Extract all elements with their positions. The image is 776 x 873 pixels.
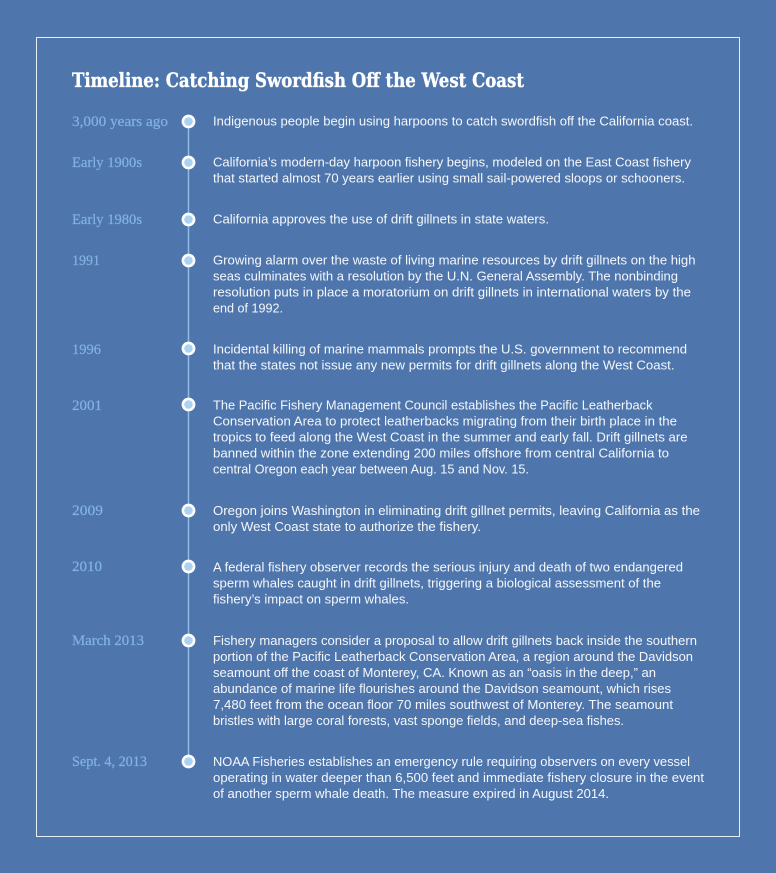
- entry: Early 1980s: [72, 212, 549, 228]
- timeline spine: [188, 121, 189, 761]
- entry: 3,000 years ago: 3,000 years ago: [72, 114, 168, 130]
- entry: 2001: [72, 398, 688, 476]
- entry: Early 1900s: Early 1900s: [72, 155, 142, 171]
- entry: 2009: 2009: [72, 503, 103, 519]
- entry: 1991: seas culminates with a resolution by the U.N. General Assembly. The nonbinding: [213, 268, 678, 284]
- entry: 1996: 1996: [72, 342, 101, 358]
- entry: March 2013: portion of the Pacific Leatherback Conservation Area, a region around the Davidson: [213, 649, 693, 664]
- entry: March 2013: [72, 633, 697, 728]
- entry: Early 1900s: that started almost 70 years earlier using small sail-powered sloops or schooners.: [213, 170, 685, 186]
- entry: 2001: Conservation Area to protect leatherbacks migrating from their birth place in the: [213, 414, 677, 428]
- entry: 2010: 2010: [72, 559, 102, 575]
- entry: 2001: The Pacific Fishery Management Council establishes the Pacific Leatherback: [213, 398, 653, 412]
- entry: 1991: [72, 252, 696, 316]
- entry: Sept. 4, 2013: [72, 754, 704, 801]
- entry: 1996: [72, 342, 687, 372]
- entry: March 2013: Fishery managers consider a proposal to allow drift gillnets back inside the southern: [213, 633, 697, 648]
- entry: Sept. 4, 2013: Sept. 4, 2013: [72, 754, 147, 770]
- entry: 1996: that the states not issue any new permits for drift gillnets along the West Coast.: [213, 358, 674, 372]
- entry: Sept. 4, 2013: NOAA Fisheries establishes an emergency rule requiring observers on every vessel: [213, 754, 690, 769]
- entry: March 2013: bristles with large coral forests, vast sponge fields, and deep-sea fishes.: [213, 713, 624, 728]
- entry: 2009: Oregon joins Washington in eliminating drift gillnet permits, leaving California as the: [213, 503, 700, 518]
- entry: 1991: 1991: [72, 253, 100, 269]
- entry: 2009: [72, 503, 700, 534]
- entry: 2001: tropics to feed along the West Coast in the summer and early fall. Drift gillnets are: [213, 430, 688, 444]
- entry: 2001: banned within the zone extending 200 miles offshore from central California to: [213, 446, 669, 460]
- entry: 2010: A federal fishery observer records the serious injury and death of two endangered: [213, 560, 683, 574]
- entry: 1996: Incidental killing of marine mammals prompts the U.S. government to recommend: [213, 342, 687, 356]
- entry: 2010: fishery’s impact on sperm whales.: [213, 592, 409, 606]
- title: Timeline: Catching Swordfish Off the West Coast: [72, 69, 524, 92]
- entry: 2010: sperm whales caught in drift gillnets, triggering a biological assessment of the: [213, 576, 661, 590]
- entry: 1991: end of 1992.: [213, 300, 283, 316]
- entry: Early 1980s: Early 1980s: [72, 212, 142, 228]
- entry: Sept. 4, 2013: operating in water deeper than 6,500 feet and immediate fishery closure in the event: [213, 770, 704, 785]
- entry: 2010: [72, 559, 683, 606]
- entry: 2001: 2001: [72, 398, 102, 414]
- entry: Sept. 4, 2013: of another sperm whale death. The measure expired in August 2014.: [213, 786, 609, 801]
- entry: Early 1900s: [72, 154, 691, 186]
- entry: March 2013: seamount off the coast of Monterey, CA. Known as an “oasis in the deep,” an: [213, 665, 656, 680]
- entry: Early 1980s: California approves the use of drift gillnets in state waters.: [213, 212, 549, 226]
- entry: 1991: Growing alarm over the waste of living marine resources by drift gillnets on the high: [213, 252, 696, 268]
- entry: 2001: central Oregon each year between Aug. 15 and Nov. 15.: [213, 462, 529, 476]
- entry: Early 1900s: California’s modern-day harpoon fishery begins, modeled on the East Coast fishery: [213, 154, 691, 170]
- entry: 2009: only West Coast state to authorize the fishery.: [213, 519, 481, 534]
- entry: 3,000 years ago: Indigenous people begin using harpoons to catch swordfish off the California coast.: [213, 114, 693, 128]
- entry: 1991: resolution puts in place a moratorium on drift gillnets in international waters by the: [213, 284, 691, 300]
- entry: March 2013: March 2013: [72, 633, 144, 649]
- entry: March 2013: 7,480 feet from the ocean floor 70 miles southwest of Monterey. The seamount: [213, 697, 673, 712]
- entry: March 2013: abundance of marine life flourishes around the Davidson seamount, which rises: [213, 681, 671, 696]
